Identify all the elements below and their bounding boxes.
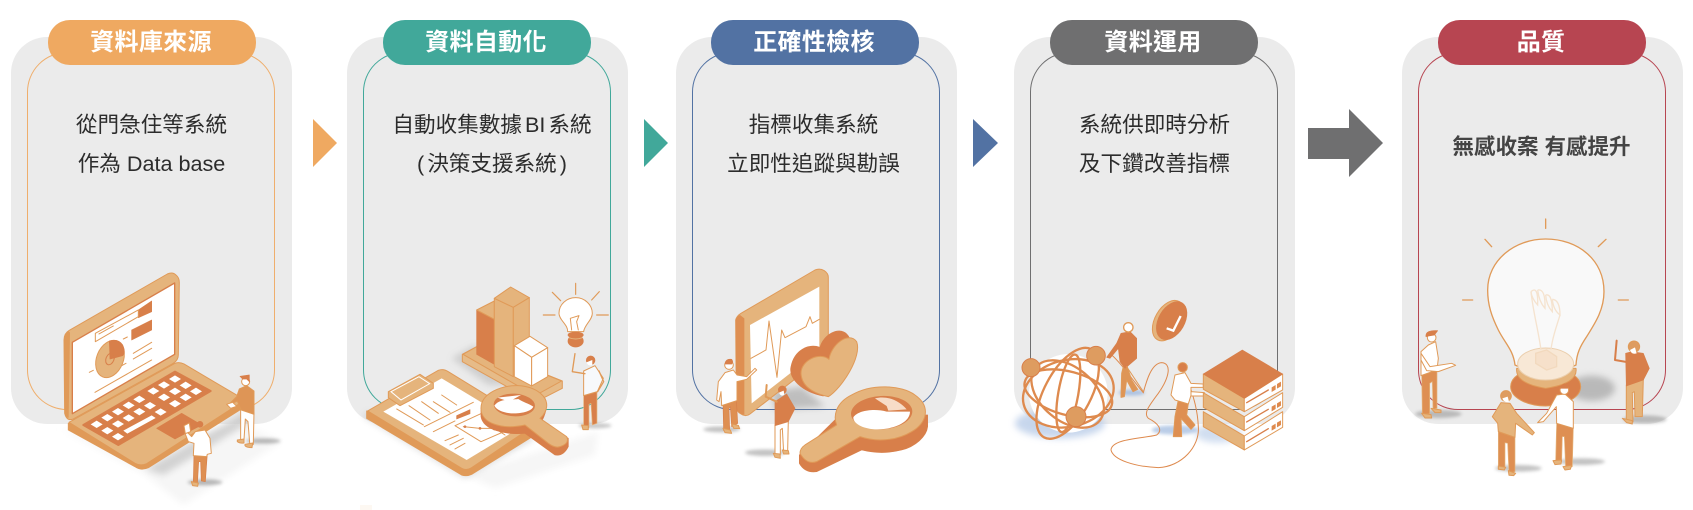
clipboard — [367, 411, 535, 476]
person: man pointing up — [572, 354, 604, 430]
person: man with cable — [1107, 323, 1143, 397]
filament — [1531, 290, 1560, 370]
check badge — [1146, 295, 1191, 346]
text: 資料運用說明: 及下鑽改善指標 — [1079, 151, 1230, 176]
heading: 資料庫來源 — [48, 20, 256, 64]
text: 資料自動化說明: ( 決策支援系統 ) — [417, 151, 567, 176]
server stack — [1203, 350, 1283, 450]
text: 正確性檢核說明 — [727, 112, 900, 176]
text: 資料運用說明 — [1079, 112, 1230, 176]
panel: 正確性檢核 — [676, 20, 957, 424]
heading: 資料庫來源: 資料庫來源 — [90, 29, 212, 56]
globe — [1029, 354, 1108, 433]
heading: 資料運用 — [1050, 20, 1258, 64]
heading: 正確性檢核: 正確性檢核 — [753, 29, 875, 56]
laptop screen — [64, 273, 179, 420]
bar chart blocks — [477, 310, 494, 364]
magnifier — [799, 415, 928, 472]
person: man in front left — [1492, 391, 1534, 476]
person: doctor — [717, 359, 757, 433]
person: man at servers — [1171, 363, 1204, 437]
text: 資料運用說明: 系統供即時分析 — [1079, 112, 1230, 137]
panel: 資料庫來源 — [11, 20, 292, 424]
text: 正確性檢核說明: 指標收集系統 — [749, 112, 878, 137]
person: man with tablet — [1421, 331, 1456, 418]
heading: 品質: 品質 — [1517, 29, 1565, 56]
text: 資料自動化說明: 自動收集數據 BI 系統 — [392, 112, 592, 137]
person: standing man — [227, 375, 254, 448]
heading: 資料自動化: 資料自動化 — [425, 29, 547, 56]
cable — [1111, 355, 1198, 468]
lightbulb — [543, 283, 608, 315]
platform — [462, 347, 562, 402]
text: 資料庫來源說明 — [76, 112, 227, 176]
text: 資料自動化說明 — [392, 112, 592, 176]
person: woman with phone — [184, 421, 211, 486]
magnifier — [481, 398, 568, 455]
panel: 資料自動化 — [347, 20, 628, 424]
heading: 資料自動化 — [383, 20, 591, 64]
person: man pointing up — [1615, 341, 1649, 424]
text: 資料庫來源說明: 作為 Data base — [78, 151, 225, 176]
laptop base — [68, 400, 245, 469]
text: 正確性檢核說明: 立即性追蹤與勘誤 — [727, 151, 900, 176]
bulb rays — [1463, 219, 1628, 300]
monitor — [736, 269, 828, 416]
text: 品質說明: 無感收案 有感提升 — [1452, 135, 1630, 159]
person: man in front right — [1538, 384, 1573, 470]
screen contents — [138, 301, 152, 318]
bulb glass — [1488, 239, 1604, 372]
panel: 品質 — [1402, 20, 1683, 424]
text: 資料庫來源說明: 從門急住等系統 — [76, 112, 227, 137]
panel: 資料運用 — [1014, 20, 1295, 424]
heading: 正確性檢核 — [711, 20, 919, 64]
bulb base — [1511, 367, 1581, 406]
heading: 品質 — [1438, 20, 1646, 64]
heading: 資料運用: 資料運用 — [1104, 29, 1202, 56]
heart — [791, 331, 851, 396]
person: man raising hand — [766, 385, 795, 458]
